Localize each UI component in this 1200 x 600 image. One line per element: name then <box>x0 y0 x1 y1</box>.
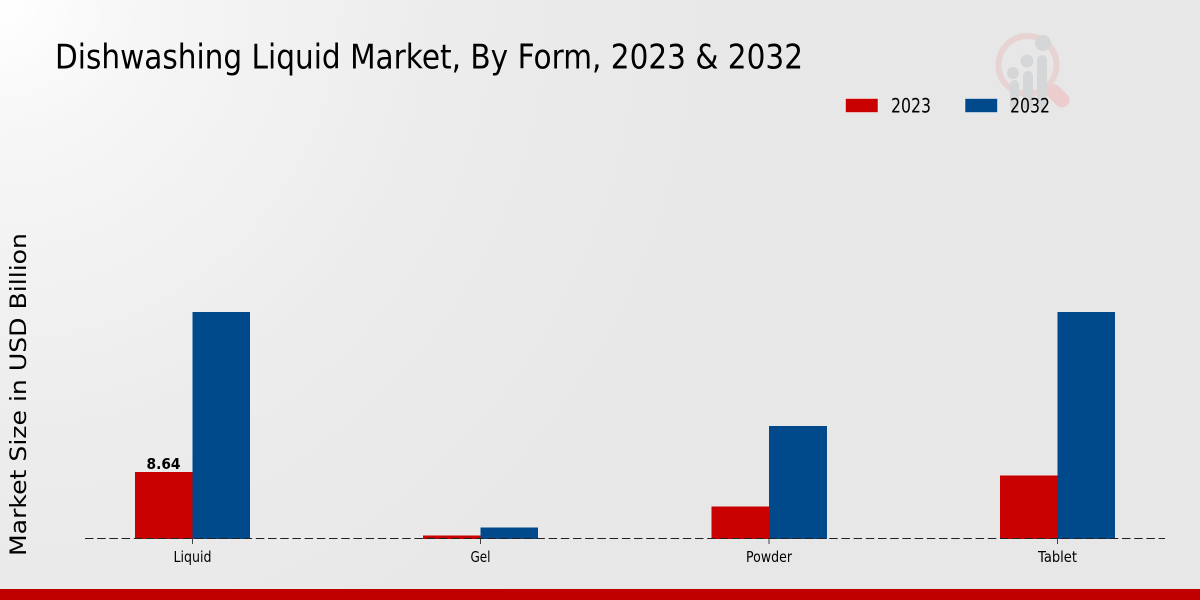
bars: Powder <box>712 426 827 539</box>
category label: Gel: Gel <box>470 548 490 566</box>
bars: Gel <box>423 528 538 539</box>
bar chart <box>85 312 1165 566</box>
legend item: 2023: 2023 <box>891 94 931 118</box>
legend item: 2023 <box>846 94 931 118</box>
y-axis label: Market Size in USD Billion <box>7 233 32 556</box>
value label: 8.64: 8.64 <box>146 455 181 473</box>
x-axis baseline <box>85 538 1165 540</box>
legend item: 2032: 2032 <box>1010 94 1050 118</box>
legend item: 2032 <box>965 94 1050 118</box>
bars: Tablet <box>1000 312 1115 539</box>
footer bar <box>0 589 1200 600</box>
category label: Powder: Powder <box>746 548 793 566</box>
icon: watermark logo <box>998 35 1062 110</box>
bars: Liquid <box>135 312 250 539</box>
title: Dishwashing Liquid Market, By Form, 2023 & 2032 <box>55 38 803 78</box>
category label: Liquid: Liquid <box>174 548 212 566</box>
category label: Tablet: Tablet <box>1037 548 1077 566</box>
legend <box>846 94 1050 118</box>
